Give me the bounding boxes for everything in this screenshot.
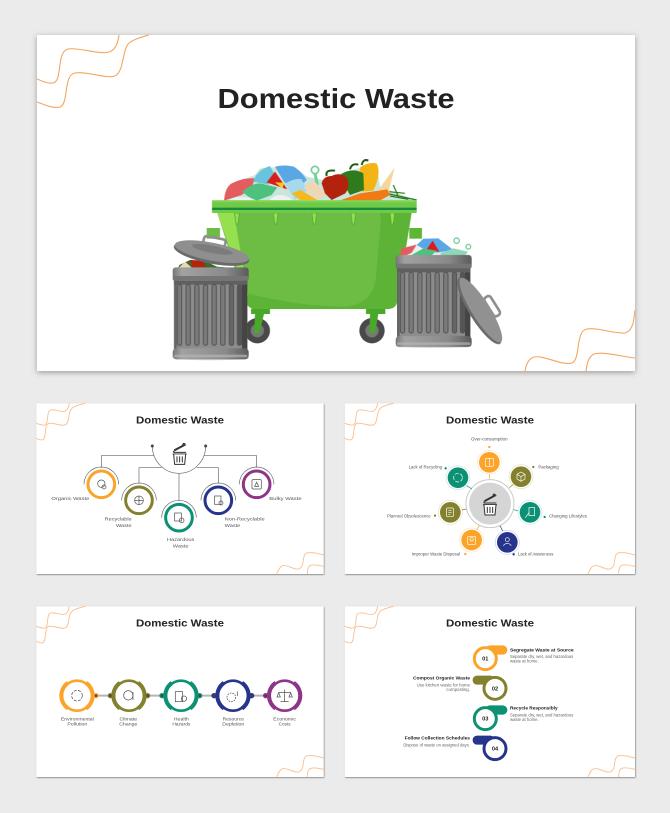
green dumpster <box>207 200 422 343</box>
heading: Domestic Waste <box>446 415 535 426</box>
cause: lack of awareness: Lack of Awareness <box>518 552 554 558</box>
item: recyclable waste <box>105 483 156 529</box>
effect: health hazards <box>160 681 202 728</box>
step 01: 01 <box>482 657 488 663</box>
cause: improper waste disposal: Improper Waste Disposal <box>412 552 460 558</box>
effect: health hazards: Health <box>174 716 189 722</box>
item: non-recyclable waste: Non-Recyclable <box>225 517 265 523</box>
title: Domestic Waste <box>218 83 454 114</box>
step 04: Dispose of waste on assigned days. <box>403 742 470 747</box>
item: bulky waste: Bulky Waste <box>269 496 302 502</box>
effect: resource depletion: Depletion <box>222 722 245 728</box>
step 03: Recycle Responsibly <box>510 706 558 712</box>
hub with trash icon <box>466 480 514 528</box>
step 02: composting. <box>446 687 470 692</box>
step 01: Separate dry, wet, and hazardous <box>510 654 573 659</box>
step 01 <box>474 645 574 670</box>
icon: trash bin <box>173 443 187 464</box>
decorative waves top left <box>37 35 149 107</box>
effect: resource depletion: Resource <box>223 716 244 722</box>
item: recyclable waste: Waste <box>116 523 132 529</box>
heading: Domestic Waste <box>136 415 225 426</box>
connector line <box>93 693 268 699</box>
step 03: Separate dry, wet, and hazardous <box>510 713 573 718</box>
effect: health hazards: Hazards <box>172 722 191 728</box>
cause: lack of awareness <box>495 526 554 558</box>
heading: Domestic Waste <box>136 618 225 629</box>
cause: changing lifestyles <box>514 500 587 524</box>
cause: packaging <box>509 465 559 489</box>
step 03 <box>474 705 573 730</box>
effect: economic costs: Costs <box>279 722 291 728</box>
cause: over-consumption: Over-consumption <box>471 436 508 442</box>
slide: cover <box>37 35 635 371</box>
garbage pile in dumpster <box>224 160 417 201</box>
effect: economic costs <box>264 681 300 728</box>
item: hazardous waste: Hazardous <box>167 537 195 543</box>
step 03: 03 <box>482 717 488 723</box>
item: hazardous waste <box>162 500 196 549</box>
item: organic waste: Organic Waste <box>51 496 90 502</box>
cause: planned obsolescence <box>387 500 466 524</box>
item: recyclable waste: Recyclable <box>105 517 132 523</box>
step 01: Segregate Waste at Source <box>510 647 574 653</box>
decorative waves bottom right <box>525 310 635 371</box>
item: bulky waste <box>239 467 302 502</box>
step 02: 02 <box>492 686 498 692</box>
left trash can with garbage and lid <box>172 230 252 360</box>
step 02 <box>413 676 506 699</box>
cause: planned obsolescence: Planned Obsolescence <box>387 514 431 520</box>
effect: resource depletion <box>212 681 254 728</box>
slide: effects <box>36 606 324 777</box>
step 04: Follow Collection Schedules <box>405 736 470 742</box>
item: organic waste <box>51 467 119 502</box>
right trash can with garbage and lid <box>395 238 514 349</box>
effect: climate change: Change <box>119 722 138 728</box>
cause: lack of recycling: Lack of Recycling <box>409 465 442 471</box>
effect: economic costs: Economic <box>273 716 296 722</box>
item: non-recyclable waste <box>201 483 265 529</box>
cause: changing lifestyles: Changing Lifestyles <box>549 514 587 520</box>
cause: lack of recycling <box>409 465 472 490</box>
illustration: waste bins <box>172 160 514 360</box>
step 04: 04 <box>492 747 499 753</box>
effect: environmental pollution: Environmental <box>61 716 94 722</box>
effect: environmental pollution: Pollution <box>67 722 88 728</box>
slide: causes <box>345 403 635 574</box>
slide: solutions <box>345 606 635 777</box>
effect: climate change <box>108 681 150 728</box>
item: non-recyclable waste: Waste <box>225 523 241 529</box>
cause: improper waste disposal <box>412 526 484 558</box>
step 01: waste at home. <box>510 659 539 664</box>
step 04 <box>403 736 506 760</box>
step 02: Compost Organic Waste <box>413 676 470 682</box>
cause: over-consumption <box>471 436 508 479</box>
slide: waste types <box>36 403 324 574</box>
connector tree <box>101 444 257 501</box>
effect: environmental pollution <box>61 681 98 728</box>
step 02: Use kitchen waste for home <box>417 682 471 687</box>
effect: climate change: Climate <box>119 716 137 722</box>
cause: packaging: Packaging <box>538 465 559 471</box>
step 03: waste at home. <box>510 717 539 722</box>
heading: Domestic Waste <box>446 618 535 629</box>
item: hazardous waste: Waste <box>173 543 189 549</box>
